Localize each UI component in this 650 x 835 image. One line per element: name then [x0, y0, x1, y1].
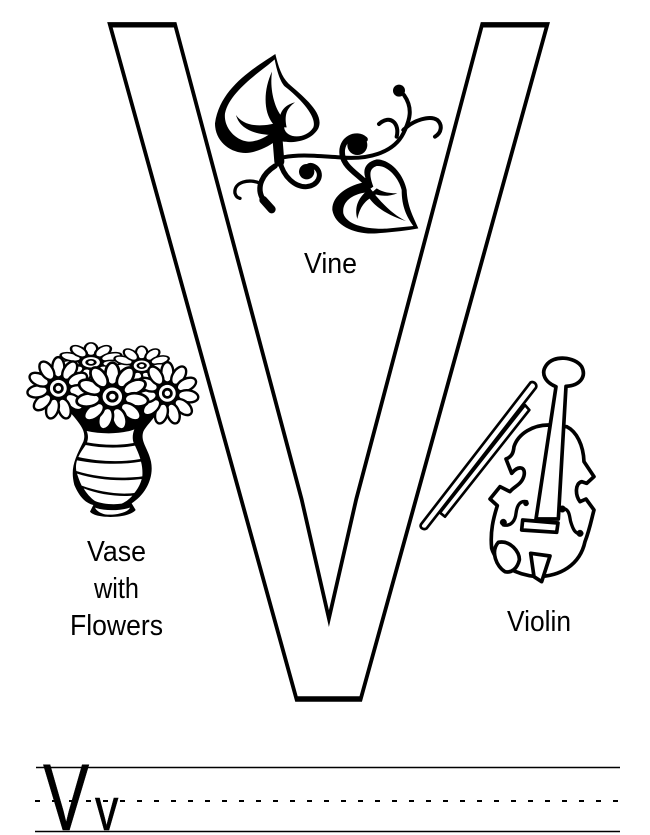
- label: Vine: Vine: [304, 248, 357, 280]
- label: Vase with Flowers: Flowers: [70, 610, 163, 642]
- icon: vine: [215, 54, 441, 234]
- label: Violin: Violin: [507, 606, 571, 638]
- label: Vase with Flowers: with: [93, 573, 139, 605]
- flowers: [27, 343, 199, 431]
- icon: vase with flowers: [27, 343, 199, 517]
- vase body: [65, 407, 162, 517]
- label: Vase with Flowers: [70, 536, 163, 642]
- icon: violin and bow: [421, 358, 594, 582]
- bow: [421, 382, 536, 529]
- label: Vase with Flowers: Vase: [87, 536, 146, 568]
- violin: [490, 358, 594, 582]
- handwriting guide lines: [35, 768, 620, 832]
